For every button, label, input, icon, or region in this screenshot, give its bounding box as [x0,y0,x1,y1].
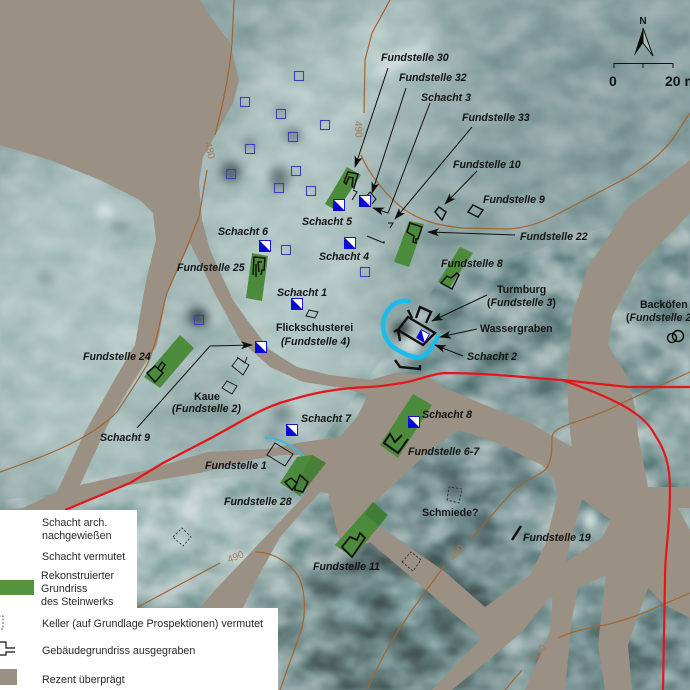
darker overlap, Fundstelle 28 [293,455,326,496]
arrow: Fundstelle 22 [428,232,515,235]
reconstructed floor plans [144,167,473,558]
label: Fundstelle 25: Fundstelle 25 [177,262,246,274]
arrow: Wassergraben [440,329,477,337]
label: Fundstelle 19: Fundstelle 19 [523,532,591,544]
building: wall south of Turmburg [395,360,420,369]
label: Fundstelle 2: (Fundstelle 2) [172,403,241,415]
building: Fundstelle 19 [512,526,521,540]
label: Fundstelle 2x: (Fundstelle 2 [626,312,690,324]
building: Fundstelle 24 [147,362,165,382]
plan: Fundstelle 8 [438,247,473,287]
contour label 490 south-west: 490 [226,549,246,566]
cellar: road south-east [402,552,421,571]
arrow: Fundstelle 33 [395,127,472,219]
arrow: Fundstelle 30 [355,68,388,167]
label: Fundstelle 30: Fundstelle 30 [381,52,449,64]
label: Fundstelle 24: Fundstelle 24 [83,351,151,363]
plan: Fundstelle 25 [246,253,268,301]
building: Fundstelle 8 [441,273,459,289]
contour label 480: 480 [202,141,216,160]
cellar: south-west [173,528,191,546]
building: above Kaue [232,357,249,375]
shaft 5 [334,200,344,210]
label: Schacht 3: Schacht 3 [421,92,471,104]
label: Fundstelle 22: Fundstelle 22 [520,231,588,243]
map labels [83,52,690,573]
label: Schacht 7: Schacht 7 [301,413,352,425]
label: Fundstelle 28: Fundstelle 28 [224,496,292,508]
red modern road lines [65,373,690,690]
arrow: Schacht 9 [137,345,252,428]
label: Schacht 6: Schacht 6 [218,226,268,238]
suspected shafts [194,72,370,324]
label: Wassergraben: Wassergraben [480,323,553,335]
shaft near Fundstelle 32 [360,196,370,206]
excavated buildings [147,172,684,557]
arrow: Schacht 2 [435,345,463,356]
contour label 470: 470 [530,642,549,663]
contour label 480 south: 480 [448,543,467,563]
building: Fundstelle 25 [253,257,265,277]
contour label 490 north: 490 [352,121,364,138]
label: Kaue: Kaue [194,391,220,403]
plan: Fundstelle 11 [335,502,388,558]
legend swatch: building [0,642,15,655]
label: Fundstelle 11: Fundstelle 11 [313,561,380,573]
label: Schacht 5: Schacht 5 [302,216,353,228]
legend text: shaft suspected: Schacht vermutet [42,551,125,563]
shaft 1 [292,298,302,310]
label: Backöfen: Backöfen [640,299,688,311]
shaft 7 [286,424,298,436]
label: Fundstelle 9: Fundstelle 9 [483,194,545,206]
recent overprint: north-west road mass [0,0,372,512]
building: Fundstelle 28 [285,475,308,492]
building: Flickschusterei [306,310,318,318]
suspected cellars [173,487,462,571]
label: Schacht 8: Schacht 8 [422,409,472,421]
arrow: Fundstelle 32 [372,88,406,193]
plan: Fundstelle 24 [144,335,194,388]
darker overlap, Fundstelle 11 [365,502,388,526]
shaft 6 [260,240,270,252]
shaft 2 [417,330,429,342]
legend swatch: cellar [0,616,3,629]
arrows [137,68,515,428]
label: Fundstelle 33: Fundstelle 33 [462,112,530,124]
building: Fundstelle 32 [365,192,376,204]
legend text: plan: Rekonstruierter [41,570,115,582]
arrow: Fundstelle 10 [445,171,477,204]
legend text: shaft proven: Schacht arch. [42,517,107,529]
building: Fundstelle 6-7 [384,434,408,453]
legend panel [0,510,278,690]
building: wall line [367,236,384,243]
label: Fundstelle 3: (Fundstelle 3) [487,297,556,309]
north arrow [634,16,653,56]
label: Fundstelle 4: (Fundstelle 4) [281,336,350,348]
building: Fundstelle 11 [342,533,365,557]
legend text: shaft proven line 2: nachgewießen [42,530,112,542]
recent overprint: south-east road network [0,160,690,690]
legend text: overprinted: Rezent überprägt [42,674,125,686]
building: Fundstelle 33 [388,223,393,228]
arrow: Schacht 3 [373,103,430,213]
building: Fundstelle 9 [468,205,483,217]
label: Fundstelle 1: Fundstelle 1 [205,460,267,472]
plan: Fundstelle 30 [325,167,361,211]
label: Schacht 2: Schacht 2 [467,351,517,363]
legend text: cellar: Keller (auf Grundlage Prospektionen) vermutet [42,618,263,630]
label: Fundstelle 32: Fundstelle 32 [399,72,467,84]
cyan ditch: Fundstelle 1 [265,438,305,457]
shaft 4 [344,238,356,248]
building: Fundstelle 30 [344,172,358,188]
label: Fundstelle 10: Fundstelle 10 [453,159,521,171]
building: Turmburg [394,307,435,345]
north arrow: N [639,16,647,27]
building: Fundstelle 22 [407,223,422,243]
label: Schacht 4: Schacht 4 [319,251,369,263]
cyan ditch: Wassergraben [383,301,438,357]
building: Backöfen [668,330,684,342]
scale bar [609,64,690,89]
label: Schacht 1: Schacht 1 [277,287,327,299]
shaft 8 [408,416,420,428]
building: Fundstelle 10 [435,207,446,220]
legend text: building: Gebäudegrundriss ausgegraben [42,645,195,657]
plan: Fundstelle 28 [280,455,326,496]
plan: Fundstelle 22 [394,221,424,267]
building: Fundstelle 1 [267,443,293,466]
building: Kaue [222,381,237,394]
scale bar: 0 [609,73,617,89]
legend text: plan line 2: Grundriss [41,583,87,595]
label: Turmburg: Turmburg [497,284,546,296]
label: Schacht 9: Schacht 9 [100,432,150,444]
shaft 9 [256,342,266,352]
proven shafts [256,196,429,436]
arrow: Turmburg [432,295,487,321]
label: Fundstelle 6-7: Fundstelle 6-7 [408,446,480,458]
label: Flickschusterei: Flickschusterei [276,322,353,334]
legend swatch: overprinted [0,669,17,685]
building: bracket near Schacht 5 [352,190,357,200]
legend text: plan line 3: des Steinwerks [41,596,113,608]
label: Schmiede: Schmiede? [422,507,479,519]
label: Fundstelle 8: Fundstelle 8 [441,258,503,270]
legend swatch: reconstructed plan [0,580,34,595]
cellar: Schmiede [447,487,462,503]
plan: Fundstelle 6-7 [380,394,432,458]
